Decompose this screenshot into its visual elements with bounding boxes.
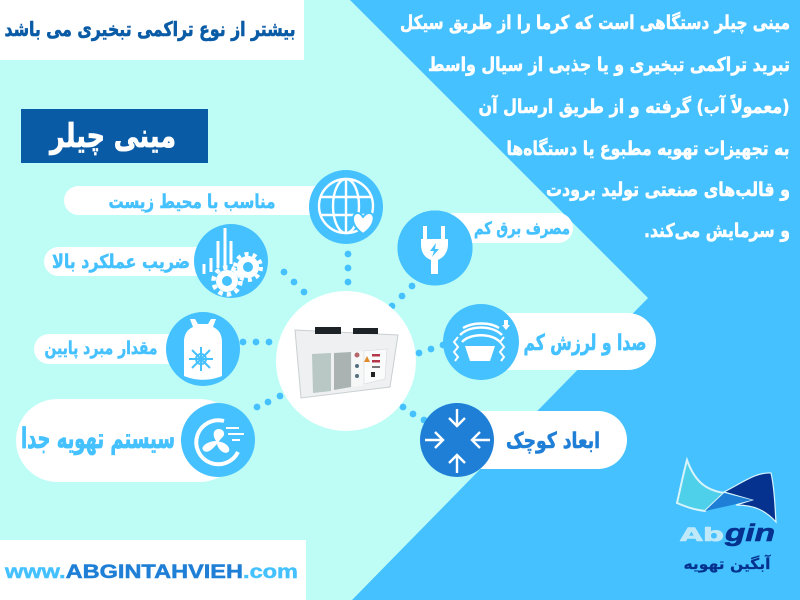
feature: low noise and vibration: صدا و لرزش کم <box>524 331 646 356</box>
feature: low refrigerant <box>34 312 240 386</box>
feature: environmentally friendly: مناسب با محیط زیست <box>108 191 276 213</box>
website banner: www. ABGINTAHVIEH .com <box>4 562 298 583</box>
title banner: بیشتر از نوع تراکمی تبخیری می باشد <box>4 17 296 41</box>
feature: separate ventilation <box>16 399 255 482</box>
description text block <box>400 11 790 242</box>
icon: speaker vibration <box>443 304 519 380</box>
feature: small dimensions: ابعاد کوچک <box>506 429 600 454</box>
feature: small dimensions <box>420 403 627 477</box>
icon: globe with heart <box>309 170 383 244</box>
icon: fan with wind <box>181 403 255 477</box>
icon: bars and gears <box>194 224 268 298</box>
heading: mini chiller: مینی چیلر <box>48 116 176 156</box>
feature: separate ventilation: سیستم تهویه جدا <box>21 422 175 455</box>
logo: Abgin Tahvieh: Ab <box>680 524 724 546</box>
connector dots <box>240 251 446 423</box>
feature: low power use <box>398 210 573 286</box>
heading: mini chiller <box>21 109 208 163</box>
icon: refrigerant tank with snowflake <box>166 312 240 386</box>
feature: environmentally friendly <box>64 170 383 244</box>
feature: high performance: ضریب عملکرد بالا <box>52 251 190 273</box>
background panel: blue arrow field <box>350 0 800 600</box>
logo: Abgin Tahvieh: gin <box>724 520 775 547</box>
title banner <box>0 0 304 60</box>
website banner <box>0 540 306 600</box>
feature: low refrigerant: مقدار مبرد پایین <box>44 338 158 359</box>
logo: Abgin Tahvieh: آبگین تهویه <box>684 555 771 573</box>
feature: high performance <box>44 224 268 298</box>
feature: low noise and vibration <box>443 304 656 380</box>
feature: low power use: مصرف برق کم <box>474 219 570 239</box>
icon: power plug <box>421 226 448 274</box>
logo: Abgin Tahvieh <box>677 460 776 573</box>
icon: inward arrows <box>420 403 494 477</box>
central image: mini chiller unit <box>276 291 416 431</box>
